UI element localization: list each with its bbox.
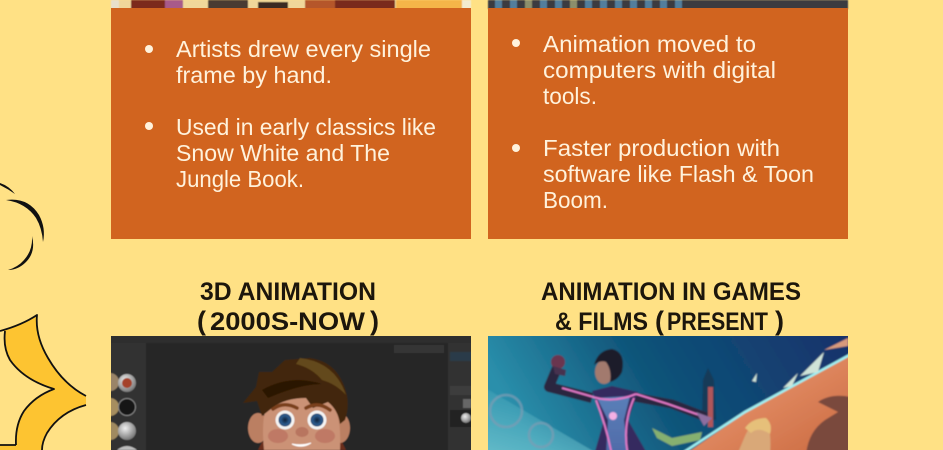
text: moved to computers: Animation moved to xyxy=(543,31,756,57)
bullet: early classics xyxy=(145,122,153,130)
lower left sky glow xyxy=(488,390,592,450)
bullet: faster production xyxy=(512,144,520,152)
text: early classics: Jungle Book. xyxy=(176,166,304,192)
icon: cloud outline decoration xyxy=(0,183,44,270)
image: game and film characters xyxy=(480,330,855,450)
tower xyxy=(702,368,716,420)
glowing diagonal edge xyxy=(684,352,855,450)
dragon silhouette xyxy=(806,395,848,450)
right layers panel xyxy=(448,344,471,450)
flying debris xyxy=(752,338,848,388)
text: early classics: Used in early classics like xyxy=(176,114,436,140)
text: faster production: software like Flash & Toon xyxy=(543,161,814,187)
heading: animation in games and films: ( xyxy=(655,306,664,336)
left material panel xyxy=(111,344,146,450)
colour dropdown xyxy=(394,345,444,353)
heading: 3D animation: 3D ANIMATION xyxy=(200,278,376,306)
heading: animation in games and films: ) xyxy=(775,306,784,336)
text: early classics: Snow White and The xyxy=(176,140,390,166)
software toolbar xyxy=(105,330,480,343)
blond man figure xyxy=(737,418,771,450)
image: 3D character in modelling software xyxy=(101,330,480,450)
text: moved to computers: computers with digital xyxy=(543,57,776,83)
heading: 3D animation: ) xyxy=(370,306,379,336)
bullet: hand drawn xyxy=(145,45,153,53)
heading: animation in games and films: ANIMATION IN GAMES xyxy=(541,278,801,306)
heroine figure xyxy=(549,349,712,450)
panel: traditional animation xyxy=(111,8,471,239)
green arm xyxy=(652,428,702,446)
text: faster production: Faster production with xyxy=(543,135,780,161)
text: hand drawn frames: Artists drew every single xyxy=(176,36,431,62)
bullet: computers xyxy=(512,39,520,47)
heading: animation in games and films: & FILMS xyxy=(555,308,648,336)
heading: 3D animation: ( xyxy=(197,306,206,336)
image strip: digital animation timeline xyxy=(488,0,848,9)
icon: yellow starburst decoration xyxy=(0,315,86,450)
heading: animation in games and films: PRESENT xyxy=(667,308,768,336)
text: faster production: Boom. xyxy=(543,187,608,213)
heading: 3D animation: 2000S-NOW xyxy=(210,308,365,336)
panel: digital 2D animation xyxy=(488,8,848,239)
diagonal desert half xyxy=(690,356,848,450)
text: moved to computers: tools. xyxy=(543,83,597,109)
character head xyxy=(243,358,350,450)
bubbles xyxy=(490,395,553,447)
text: hand drawn frames: frame by hand. xyxy=(176,62,332,88)
image strip: traditional animation film still xyxy=(111,0,471,9)
